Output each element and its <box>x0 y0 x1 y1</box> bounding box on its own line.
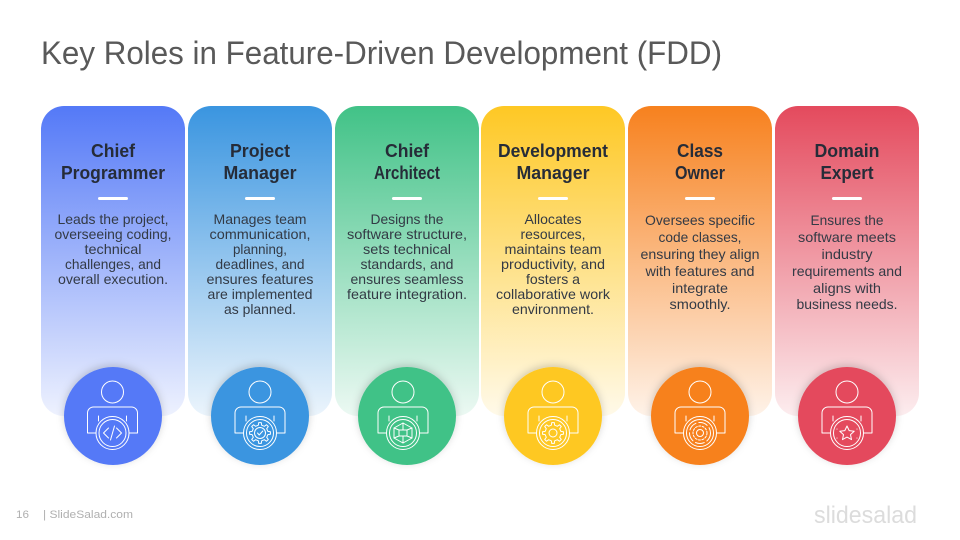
description: software meets <box>798 229 896 245</box>
divider dash <box>538 197 568 200</box>
description: challenges, and <box>65 256 161 272</box>
description: maintains team <box>504 241 602 257</box>
icon: person with code badge <box>64 367 162 465</box>
description: productivity, and <box>501 256 605 272</box>
card background <box>481 106 625 416</box>
divider dash <box>832 197 862 200</box>
description: ensuring they align <box>640 246 760 262</box>
description: software structure, <box>347 226 467 242</box>
icon: person with network badge <box>358 367 456 465</box>
heading: Chief <box>385 141 430 161</box>
description <box>347 211 467 302</box>
description: planning, <box>233 241 287 257</box>
heading: Programmer <box>61 163 165 183</box>
description: with features and <box>644 263 754 279</box>
description: collaborative work <box>496 286 611 302</box>
heading <box>814 141 880 183</box>
description: industry <box>822 246 872 262</box>
description: as planned. <box>224 301 296 317</box>
icon: person with star badge <box>798 367 896 465</box>
heading <box>224 141 296 183</box>
heading <box>374 141 440 183</box>
description <box>792 212 902 312</box>
title: Key Roles in Feature-Driven Development (FDD) <box>41 35 722 71</box>
card background <box>775 106 919 416</box>
panel: Domain Expert <box>775 106 919 465</box>
description: resources, <box>520 226 586 242</box>
description: requirements and <box>792 263 902 279</box>
panel: Class Owner <box>628 106 772 465</box>
description <box>206 211 314 317</box>
heading <box>498 141 608 183</box>
description: communication, <box>210 226 310 242</box>
description: feature integration. <box>347 286 467 302</box>
panel: Chief Architect <box>335 106 479 465</box>
heading: Manager <box>224 163 296 183</box>
card background <box>335 106 479 416</box>
description: technical <box>84 241 142 257</box>
footer: page number and site: 16 <box>16 509 29 521</box>
description: Oversees specific <box>645 212 755 228</box>
heading <box>675 141 725 183</box>
logo: slidesalad: slidesalad <box>814 502 917 529</box>
description: ensures features <box>206 271 314 287</box>
description: Leads the project, <box>58 211 168 227</box>
description <box>496 211 611 317</box>
card background <box>628 106 772 416</box>
description: smoothly. <box>670 296 730 312</box>
panel: Project Manager <box>188 106 332 465</box>
description: standards, and <box>360 256 454 272</box>
heading: Class <box>677 141 723 161</box>
description: are implemented <box>208 286 312 302</box>
description: ensures seamless <box>350 271 464 287</box>
heading: Expert <box>820 163 874 183</box>
heading: Development <box>498 141 608 161</box>
description: overseeing coding, <box>54 226 172 242</box>
heading: Chief <box>91 141 136 161</box>
description: deadlines, and <box>216 256 304 272</box>
description: environment. <box>512 301 594 317</box>
divider dash <box>685 197 715 200</box>
icon: person with gear badge <box>504 367 602 465</box>
heading: Project <box>230 141 290 161</box>
heading: Manager <box>516 163 590 183</box>
description: Allocates <box>524 211 582 227</box>
heading: Owner <box>675 163 725 183</box>
description: Manages team <box>214 211 306 227</box>
description <box>640 212 760 312</box>
description: integrate <box>672 280 728 296</box>
divider dash <box>392 197 422 200</box>
description: code classes, <box>658 229 742 245</box>
panel: Chief Programmer <box>41 106 185 465</box>
description: sets technical <box>363 241 451 257</box>
divider dash <box>98 197 128 200</box>
card background <box>188 106 332 416</box>
footer: page number and site: | SlideSalad.com <box>43 509 133 521</box>
description <box>54 211 172 287</box>
heading: Domain <box>814 141 880 161</box>
card background <box>41 106 185 416</box>
description: business needs. <box>796 296 898 312</box>
icon: person with gear check badge <box>211 367 309 465</box>
panel: Development Manager <box>481 106 625 465</box>
divider dash <box>245 197 275 200</box>
heading <box>61 141 165 183</box>
description: fosters a <box>526 271 580 287</box>
description: Ensures the <box>810 212 884 228</box>
description: Designs the <box>370 211 444 227</box>
description: aligns with <box>813 280 881 296</box>
description: overall execution. <box>58 271 168 287</box>
icon: person with circuit gear badge <box>651 367 749 465</box>
heading: Architect <box>374 163 440 183</box>
